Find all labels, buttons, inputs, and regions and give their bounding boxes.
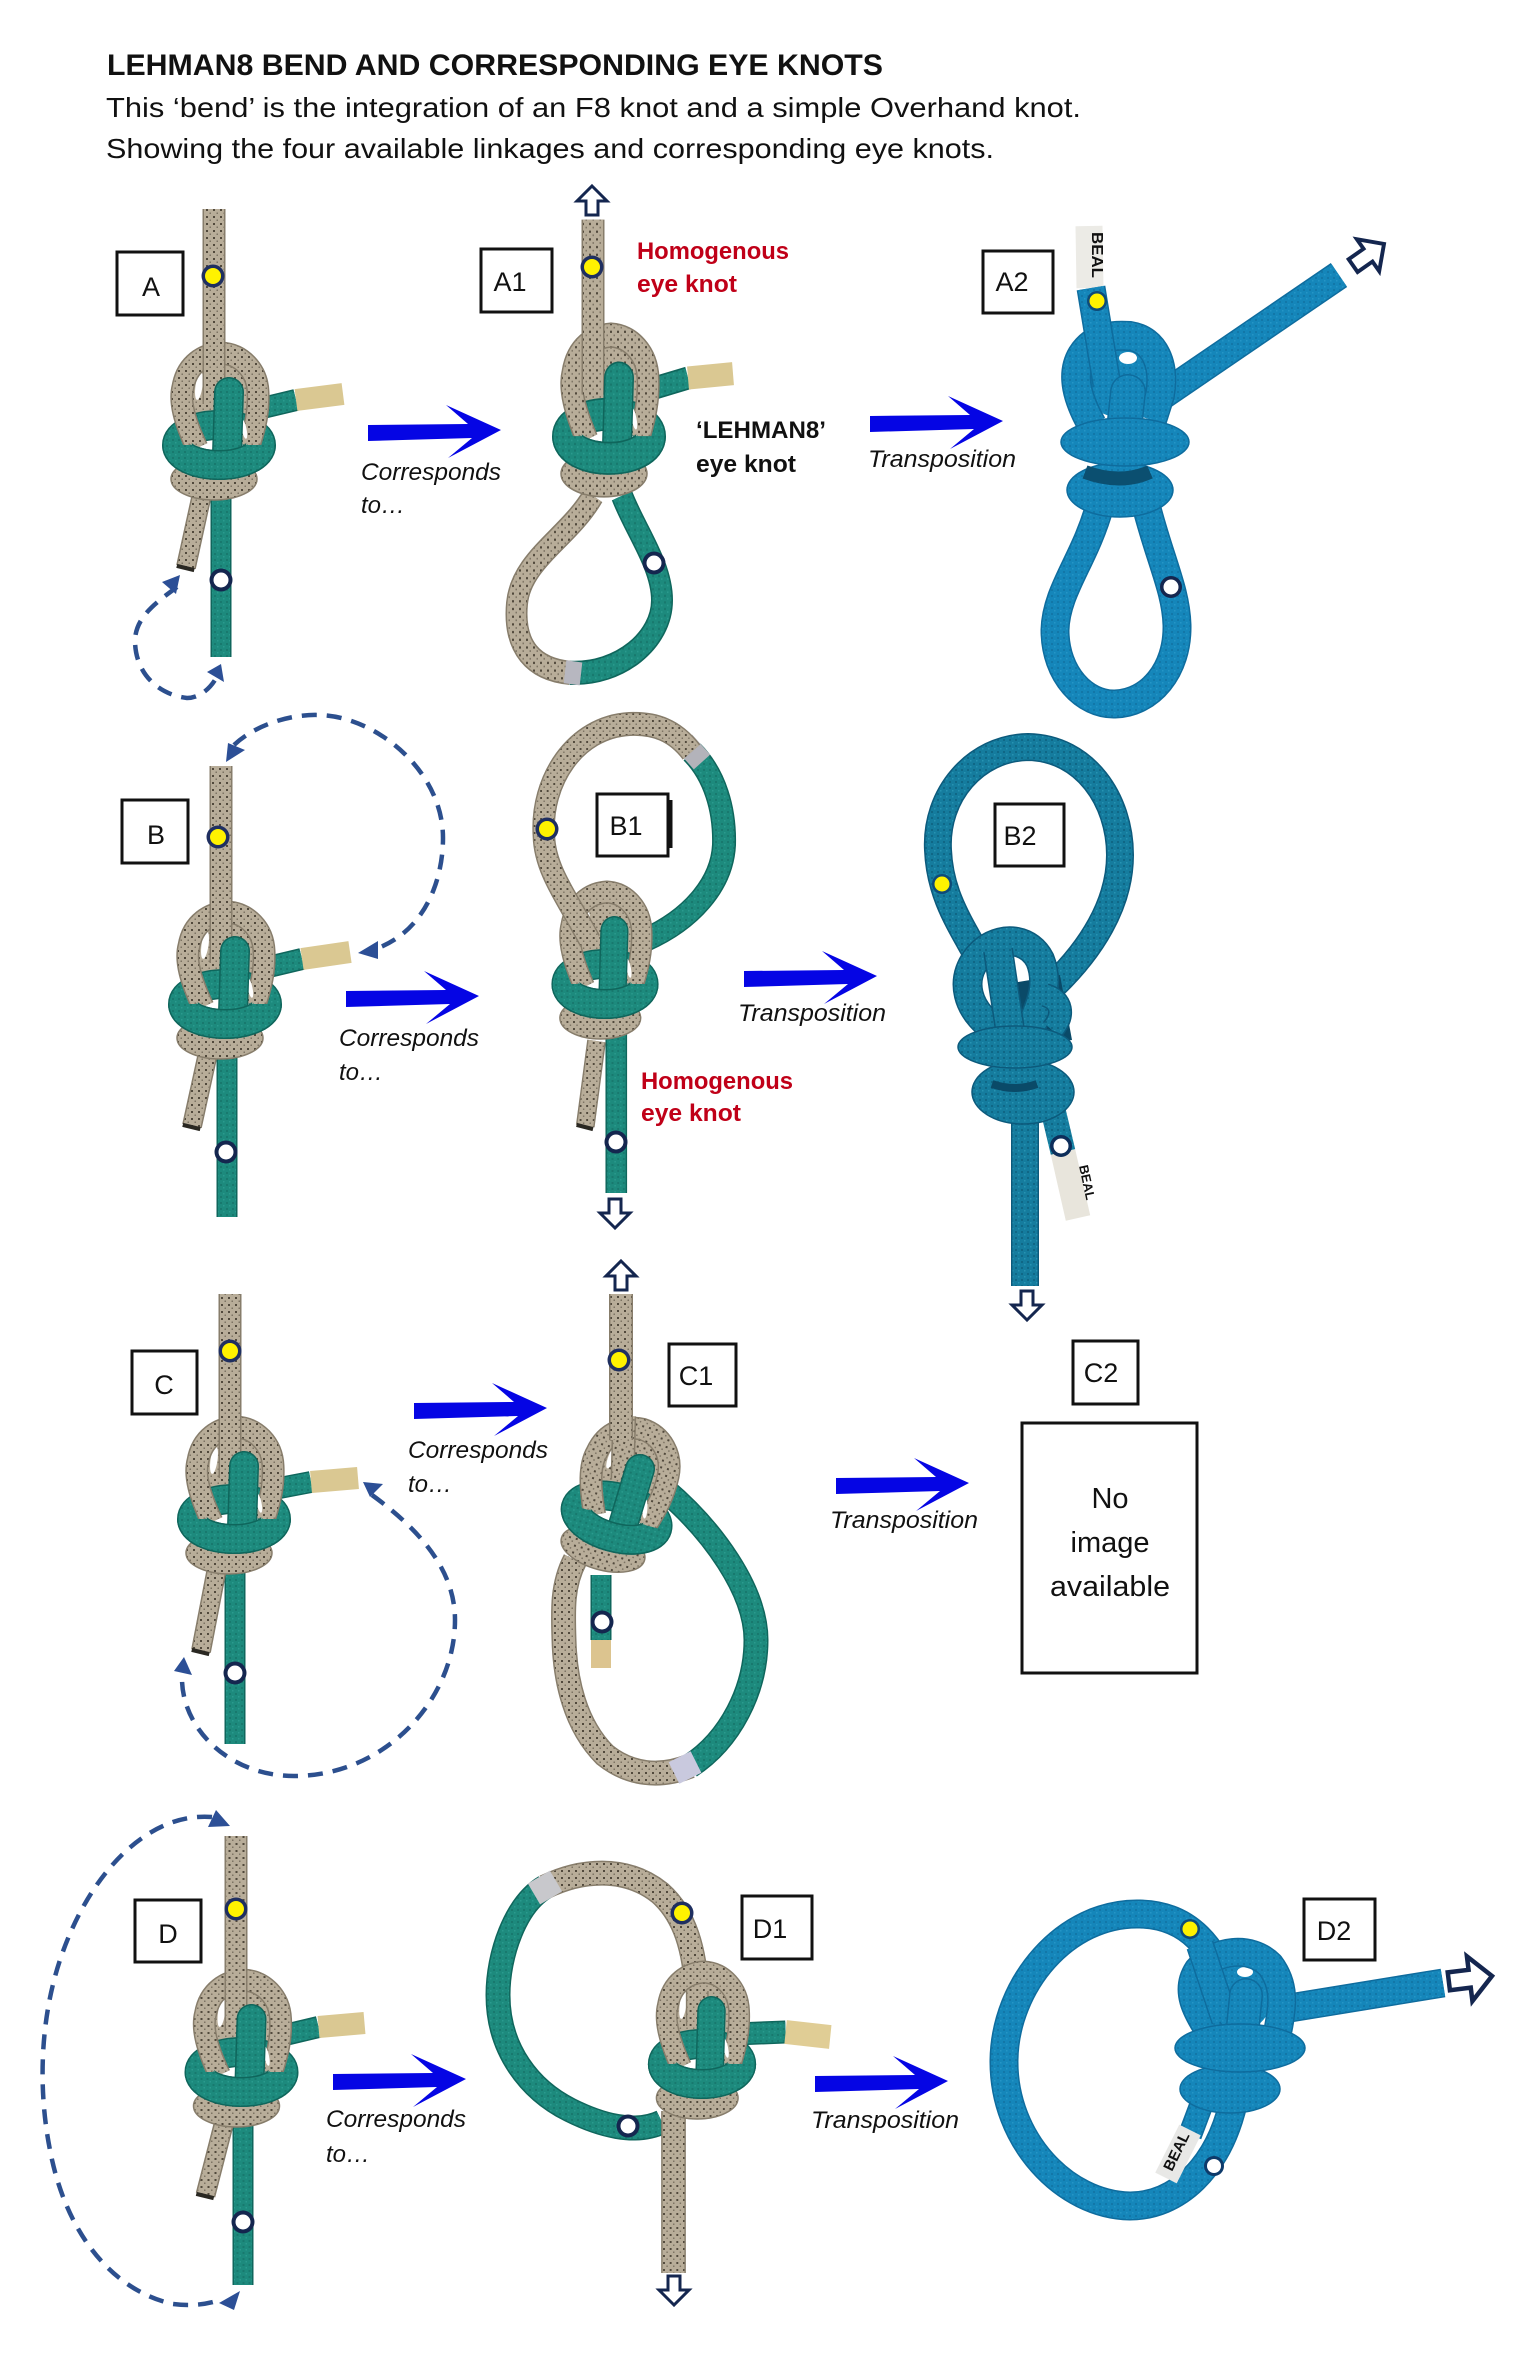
white marker <box>590 1610 614 1634</box>
yellow marker <box>206 826 230 848</box>
load arrow down <box>659 2276 689 2305</box>
callout: LEHMAN8 eye knot: eye knot <box>696 451 796 478</box>
load arrow down <box>1012 1291 1042 1320</box>
arrow: transposition B <box>744 951 877 1004</box>
dashed linkage arrow <box>226 715 443 959</box>
label box C1 <box>669 1344 736 1406</box>
white marker <box>642 552 666 574</box>
callout: homogenous eye knot B1: eye knot <box>641 1100 741 1127</box>
B1 eye loop <box>645 742 724 940</box>
label: transposition D: Transposition <box>811 2107 959 2134</box>
callout: homogenous eye knot A1 <box>637 238 789 298</box>
label: corresponds to B: Corresponds <box>339 1025 479 1052</box>
callout: homogenous eye knot A1: eye knot <box>637 271 737 298</box>
D1 eye loop <box>498 1873 697 2128</box>
yellow marker <box>580 256 604 278</box>
label: corresponds to C <box>408 1437 548 1498</box>
white marker <box>214 1140 238 1164</box>
label box A <box>117 252 183 315</box>
label box C1: C1 <box>679 1361 713 1391</box>
dashed linkage arrow <box>174 1482 455 1776</box>
no image placeholder: available <box>1050 1571 1170 1603</box>
label box C2 <box>1073 1341 1138 1404</box>
white marker <box>1050 1135 1072 1157</box>
white marker <box>1160 576 1182 598</box>
label box C2: C2 <box>1084 1358 1118 1388</box>
B2 rope and knot <box>938 747 1120 1286</box>
A1 knot and eye <box>517 220 733 674</box>
white marker <box>224 1662 246 1684</box>
A2 rope and knot <box>1055 275 1339 704</box>
callout: LEHMAN8 eye knot <box>696 417 826 478</box>
white marker <box>232 2210 254 2234</box>
arrow: corresponds to C <box>414 1383 547 1436</box>
label: corresponds to A: Corresponds <box>361 459 501 486</box>
no image placeholder: No <box>1091 1483 1129 1515</box>
B2 rope and knot: BEAL <box>1076 1164 1098 1201</box>
dashed linkage arrow <box>43 1810 240 2310</box>
load arrow right <box>1446 1954 1495 2004</box>
yellow marker <box>218 1340 242 1362</box>
intro text: This ‘bend’ is the integration of an F8 knot and a simple Overhand knot. <box>106 92 1081 123</box>
arrow: transposition C <box>836 1458 969 1511</box>
load arrow up-right <box>1342 228 1395 282</box>
label box B1: B1 <box>609 811 643 841</box>
label box D2: D2 <box>1317 1916 1351 1946</box>
label box B <box>122 800 188 863</box>
panel: eye knot A2 <box>983 226 1395 704</box>
label box B: B <box>147 820 165 850</box>
intro text: Showing the four available linkages and corresponding eye knots. <box>106 133 994 164</box>
white marker <box>604 1130 628 1154</box>
no image placeholder <box>1022 1423 1197 1673</box>
panel: eye knot D2 <box>1004 1899 1495 2206</box>
panel: eye knot A1 <box>481 186 733 674</box>
white marker <box>210 568 232 592</box>
panel: eye knot D1 <box>498 1873 830 2305</box>
label box D1 <box>742 1896 812 1959</box>
label: corresponds to C: to… <box>408 1471 452 1498</box>
white marker <box>1204 2156 1224 2176</box>
yellow marker <box>1180 1919 1200 1939</box>
yellow marker <box>1087 291 1107 311</box>
label box D: D <box>158 1919 178 1949</box>
bend D knot <box>194 1836 364 2285</box>
arrow: transposition A <box>870 396 1003 449</box>
panel: bend A <box>117 209 343 698</box>
label: transposition A: Transposition <box>868 446 1016 473</box>
label box D1: D1 <box>753 1914 787 1944</box>
panel: bend B <box>122 715 443 1217</box>
panel: eye knot B2 <box>932 747 1120 1320</box>
C1 rope and knot <box>556 1294 756 1773</box>
label: corresponds to A: to… <box>361 492 405 519</box>
yellow marker <box>608 1348 630 1372</box>
yellow marker <box>224 1898 248 1920</box>
label: corresponds to A <box>361 459 501 519</box>
label box C: C <box>154 1370 174 1400</box>
panel: bend D <box>43 1810 364 2310</box>
label box A1 <box>481 249 552 312</box>
bend B knot <box>177 766 350 1217</box>
label box A: A <box>142 272 160 302</box>
B1 knot <box>544 724 691 1193</box>
panel: eye knot C1 <box>556 1261 756 1773</box>
label: corresponds to D: to… <box>326 2141 370 2168</box>
yellow marker <box>932 874 952 894</box>
bend C knot <box>186 1294 358 1744</box>
no image placeholder: image <box>1070 1527 1150 1559</box>
D1 knot <box>656 1972 830 2273</box>
load arrow up <box>606 1261 636 1290</box>
callout: homogenous eye knot B1: Homogenous <box>641 1068 793 1095</box>
intro text <box>106 92 1081 164</box>
A2 label tip: BEAL <box>1088 232 1105 278</box>
panel: bend C <box>132 1294 455 1776</box>
label: corresponds to B <box>339 1025 479 1086</box>
label box B2: B2 <box>1003 821 1037 851</box>
callout: homogenous eye knot B1 <box>641 1068 793 1127</box>
callout: LEHMAN8 eye knot: ‘LEHMAN8’ <box>696 417 826 444</box>
label: transposition C: Transposition <box>830 1507 978 1534</box>
label box D2 <box>1304 1899 1375 1960</box>
label box B1 <box>597 794 671 856</box>
arrow: transposition D <box>815 2056 948 2109</box>
load arrow up <box>577 186 607 215</box>
arrow: corresponds to D <box>333 2054 466 2107</box>
label box D <box>135 1900 201 1962</box>
dashed linkage arrow <box>135 575 224 698</box>
title: LEHMAN8 BEND AND CORRESPONDING EYE KNOTS <box>107 49 883 82</box>
D2 rope and knot <box>1004 1914 1443 2206</box>
arrow: corresponds to A <box>368 405 501 458</box>
label: corresponds to D: Corresponds <box>326 2106 466 2133</box>
yellow marker <box>536 818 558 840</box>
D2 rope and knot: BEAL <box>1160 2130 1193 2174</box>
label: corresponds to B: to… <box>339 1059 383 1086</box>
arrow: corresponds to B <box>346 971 479 1024</box>
label box A2 <box>983 251 1053 313</box>
yellow marker <box>202 264 224 288</box>
panel: C2 no image <box>1022 1341 1197 1673</box>
label: corresponds to C: Corresponds <box>408 1437 548 1464</box>
label box A2: A2 <box>995 267 1029 297</box>
panel: eye knot B1 <box>536 724 724 1228</box>
label box B2 <box>995 804 1064 866</box>
yellow marker <box>670 1902 694 1924</box>
label box A1: A1 <box>493 267 527 297</box>
bend A knot <box>171 209 343 657</box>
white marker <box>616 2114 640 2138</box>
label box C <box>132 1351 197 1414</box>
load arrow down <box>600 1199 630 1228</box>
label: corresponds to D <box>326 2106 466 2168</box>
callout: homogenous eye knot A1: Homogenous <box>637 238 789 265</box>
label: transposition B: Transposition <box>738 1000 886 1027</box>
